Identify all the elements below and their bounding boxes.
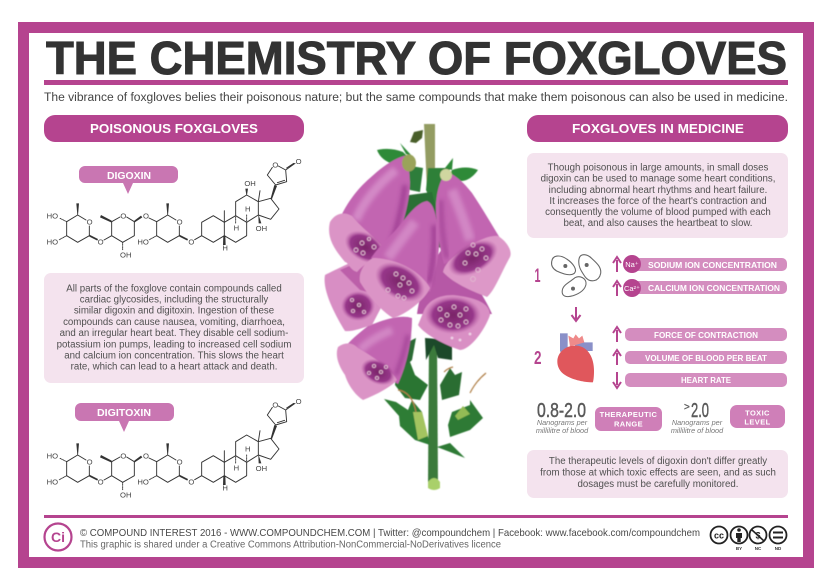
molecule: digoxin: HO <box>137 237 149 246</box>
molecule: digoxin: O <box>188 237 194 246</box>
icons: creative commons licence: NC <box>755 546 762 551</box>
text block: toxicity: similar digoxin and digitoxin. Ingestion of these <box>74 306 274 317</box>
label: digitoxin <box>75 403 174 432</box>
stat: toxic dose: 2.0 <box>691 399 709 422</box>
molecule: digitoxin: O <box>143 452 149 461</box>
text block: medicinal use: digoxin can be used to manage some heart conditions, <box>541 174 775 185</box>
stat: toxic dose <box>671 399 724 435</box>
molecule: digitoxin: O <box>177 457 183 466</box>
molecule: digoxin: OH <box>244 179 256 188</box>
text block: medicinal use <box>527 153 788 238</box>
effect: heart rate <box>613 372 787 388</box>
text block: medicinal use: It increases the force of the heart's contraction and <box>549 196 767 207</box>
text block: toxicity: rate, which can lead to a heart attack and death. <box>71 362 277 372</box>
label: digoxin <box>79 166 178 194</box>
icon: heart <box>557 333 594 382</box>
molecule: digoxin: O <box>177 217 183 226</box>
stat: therapeutic dose: Nanograms per <box>537 418 588 427</box>
molecule: digoxin: H <box>245 204 251 213</box>
illustration: foxglove flower <box>325 124 511 490</box>
molecule: digitoxin: HO <box>47 452 58 461</box>
lower leaves <box>384 338 486 490</box>
stat: toxic dose: Nanograms per <box>672 418 723 427</box>
text block: medicinal use: Though poisonous in large amounts, in small doses <box>548 162 769 173</box>
icons: creative commons licence: $ <box>755 530 761 540</box>
molecule: digoxin: O <box>87 217 93 226</box>
stat: toxic dose: > <box>684 402 690 413</box>
heading: poisonous foxgloves <box>44 115 304 142</box>
upper leaves <box>377 143 478 250</box>
effect: volume of blood per beat: VOLUME OF BLOOD PER BEAT <box>645 354 767 363</box>
stat: toxic dose: millilitre of blood <box>671 426 724 435</box>
heading: poisonous foxgloves: POISONOUS FOXGLOVES <box>90 122 258 136</box>
molecule: digitoxin: O <box>272 400 278 409</box>
molecule: digitoxin: H <box>222 484 228 493</box>
text block: monitoring: The therapeutic levels of digoxin don't differ greatly <box>549 456 767 467</box>
molecule: digitoxin: OH <box>120 490 131 499</box>
label: digitoxin: DIGITOXIN <box>97 407 151 419</box>
effect: heart rate: HEART RATE <box>681 376 732 385</box>
molecule: digitoxin: O <box>296 397 302 406</box>
icon: cells <box>552 255 601 297</box>
flower bell: upper right <box>436 169 511 297</box>
molecule: digoxin: O <box>272 160 278 169</box>
molecule: digitoxin: O <box>87 457 93 466</box>
label: therapeutic range: THERAPEUTIC <box>600 410 658 419</box>
molecule: digoxin: O <box>98 237 104 246</box>
text block: toxicity: compounds can cause nausea, vomiting, diarrhoea, <box>63 317 285 328</box>
molecule: digitoxin: HO <box>137 477 149 486</box>
step number 1: 1 <box>534 266 541 287</box>
text block: toxicity: All parts of the foxglove contain compounds called <box>66 283 282 294</box>
icons: creative commons licence: BY <box>736 546 742 551</box>
molecule: digoxin: O <box>143 212 149 221</box>
logo: Ci <box>51 529 65 545</box>
molecule: digitoxin: O <box>120 452 126 461</box>
label: toxic level: LEVEL <box>744 418 771 426</box>
molecule: digoxin: O <box>120 212 126 221</box>
effect: calcium ion concentration <box>613 279 787 297</box>
logo <box>44 524 72 550</box>
effect: force of contraction <box>613 327 787 342</box>
bud near stem top <box>410 130 423 143</box>
text block: medicinal use: beat, and also causes the heartbeat to slow. <box>563 218 753 229</box>
label: therapeutic range <box>595 407 662 431</box>
molecule: digitoxin: O <box>188 477 194 486</box>
step number 2: 2 <box>534 348 542 368</box>
text block: toxicity: and calcium ion concentration. This slows the heart <box>64 350 284 361</box>
molecule: digoxin: HO <box>47 237 58 246</box>
text block: medicinal use: consequently the volume of blood pumped with each <box>545 207 771 218</box>
molecule: digoxin: H <box>234 224 239 233</box>
molecule: digitoxin: H <box>245 444 251 453</box>
molecule: digitoxin: H <box>234 464 239 473</box>
molecule: digoxin: O <box>296 157 302 166</box>
title: THE CHEMISTRY OF FOXGLOVES <box>46 32 787 84</box>
molecule: digoxin: H <box>222 244 228 253</box>
arrow: cells to heart <box>572 307 580 321</box>
text block: toxicity: potassium ion pumps, leading to increased cell sodium <box>57 339 291 350</box>
subtitle: The vibrance of foxgloves belies their poisonous nature; but the same compounds that make them poisonous can also be used in medicine. <box>44 92 788 104</box>
footer credits: This graphic is shared under a Creative Commons Attribution-NonCommercial-NoDerivatives licence <box>80 540 501 550</box>
flower bell: far left <box>325 255 385 331</box>
effect: volume of blood per beat <box>613 350 787 365</box>
text block: toxicity: and an irregular heart beat. They disable cell sodium- <box>60 328 288 339</box>
molecule: digitoxin: HO <box>47 477 58 486</box>
icons: creative commons licence <box>710 526 786 551</box>
flower bell: centre <box>360 201 439 318</box>
text block: monitoring: from those at which toxic effects are seen, and as such <box>540 468 776 479</box>
effect: calcium ion concentration: CALCIUM ION CONCENTRATION <box>648 284 780 293</box>
stem <box>424 124 435 190</box>
label: toxic level: TOXIC <box>745 408 770 418</box>
text block: monitoring <box>527 450 788 498</box>
text block: medicinal use: including abnormal heart rhythms and heart failure. <box>549 185 767 196</box>
molecule: digoxin: OH <box>256 224 267 233</box>
molecule: digitoxin: OH <box>256 464 267 473</box>
effect: sodium ion concentration: Na⁺ <box>625 260 639 269</box>
label: digoxin: DIGOXIN <box>107 170 151 182</box>
flower bell: lower centre right <box>417 243 492 350</box>
molecule: digoxin <box>47 157 302 259</box>
effect: sodium ion concentration: SODIUM ION CONCENTRATION <box>648 261 777 270</box>
icons: creative commons licence: cc <box>714 530 724 540</box>
footer credits <box>80 527 700 550</box>
flower bell: lower left <box>337 317 412 400</box>
stat: therapeutic dose: 0.8-2.0 <box>537 399 586 422</box>
molecule: digoxin: OH <box>120 250 131 259</box>
footer divider <box>44 515 788 518</box>
effect: force of contraction: FORCE OF CONTRACTION <box>654 331 758 340</box>
text block: toxicity <box>44 273 304 383</box>
label: therapeutic range: RANGE <box>614 420 643 428</box>
heading: foxgloves in medicine: FOXGLOVES IN MEDICINE <box>572 122 744 136</box>
effect: sodium ion concentration <box>613 255 787 273</box>
title underline <box>44 80 788 85</box>
flower bell: upper left <box>329 154 416 272</box>
molecule: digoxin: HO <box>47 212 58 221</box>
molecule: digitoxin <box>47 397 302 499</box>
footer credits: © COMPOUND INTEREST 2016 - WWW.COMPOUNDCHEM.COM | Twitter: @compoundchem | Facebook: www.facebook.com/compoundchem <box>80 527 700 539</box>
stat: therapeutic dose: millilitre of blood <box>536 426 589 435</box>
effect: calcium ion concentration: Ca²⁺ <box>624 284 640 293</box>
text block: toxicity: cardiac glycosides, including the structurally <box>80 294 268 306</box>
molecule: digitoxin: O <box>98 477 104 486</box>
label: toxic level <box>730 405 785 428</box>
heading: foxgloves in medicine <box>527 115 788 142</box>
stat: therapeutic dose <box>536 399 589 435</box>
text block: monitoring: dosages must be carefully monitored. <box>577 479 739 490</box>
icons: creative commons licence: ND <box>775 546 782 551</box>
